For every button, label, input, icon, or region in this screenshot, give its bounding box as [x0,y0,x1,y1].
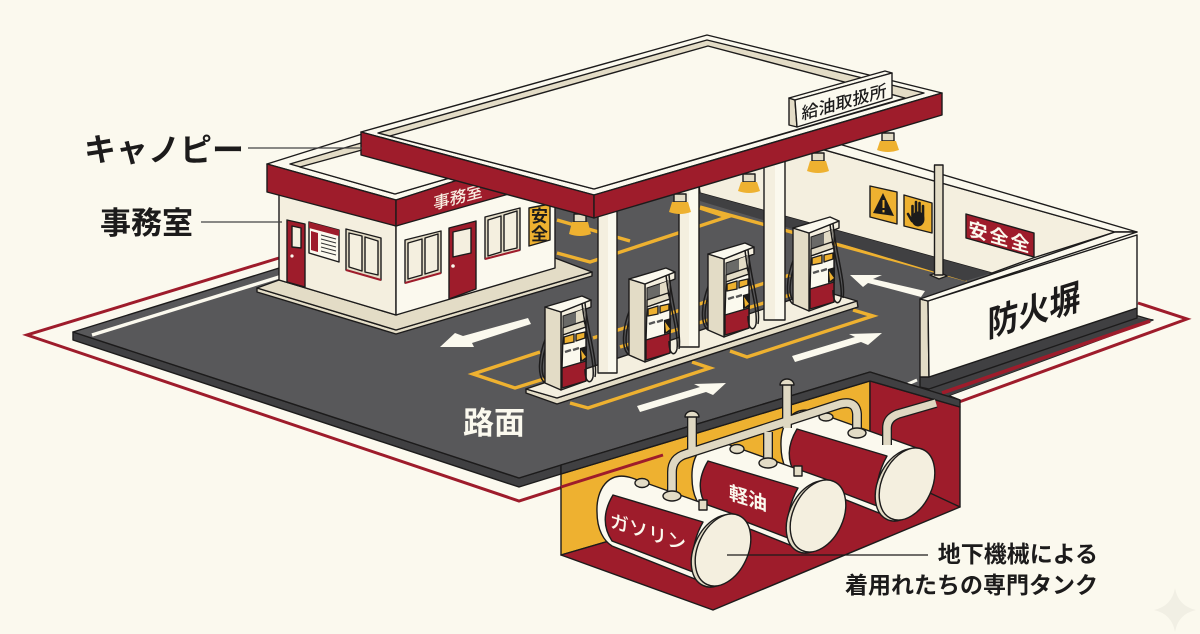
notice board [309,222,339,262]
tank: front ガソリン: ガソリン [610,510,686,556]
front window [405,231,441,283]
lane arrows [440,275,925,412]
vertical safety sign: 全 [531,225,548,244]
tank: rear [781,410,946,530]
canopy pillars [598,160,785,373]
station name sign [789,71,892,127]
pump island [526,290,858,404]
station name sign: 給油取扱所 [802,80,886,124]
label: underground tanks: 着用れたちの専門タンク [845,572,1098,598]
asphalt road surface [73,165,1153,487]
dispenser 1 [539,296,596,390]
warning sign [870,186,897,224]
label: road surface: 路面 [463,406,525,441]
hand stop sign [904,195,932,233]
vent pipes and manifold [663,379,936,501]
label: office: 事務室 [100,206,193,241]
tank: middle 軽油: 軽油 [729,482,767,516]
label: underground tanks [727,541,1098,598]
label: underground tanks: 地下機械による [938,541,1098,567]
label: canopy: キャノピー [84,132,244,168]
yellow forecourt markings [473,207,967,408]
dispenser 4 [787,217,844,311]
office roof [267,130,530,226]
office fascia sign: 事務室 [433,182,483,214]
tank: middle 軽油 [692,442,857,562]
dispenser 3 [702,243,759,337]
rear window [485,208,520,259]
side window [346,229,381,280]
underground tank pit [561,372,960,610]
lamp post [930,165,947,279]
front door [449,221,476,299]
office base [257,258,592,334]
vertical safety sign [529,204,550,246]
red site boundary [27,258,1187,501]
safety banner: 安全全 [969,219,1031,258]
office building [257,130,592,334]
canopy [361,35,942,218]
fire wall front [920,232,1137,389]
vertical safety sign: 安 [531,207,548,226]
side door [287,220,305,287]
rear fire wall [690,100,1137,281]
fire wall label: 防火塀 [988,277,1080,346]
decorative sparkle [1154,588,1196,632]
tank: front ガソリン [597,476,762,596]
dispenser 2 [623,268,680,362]
canopy lights [569,133,899,236]
